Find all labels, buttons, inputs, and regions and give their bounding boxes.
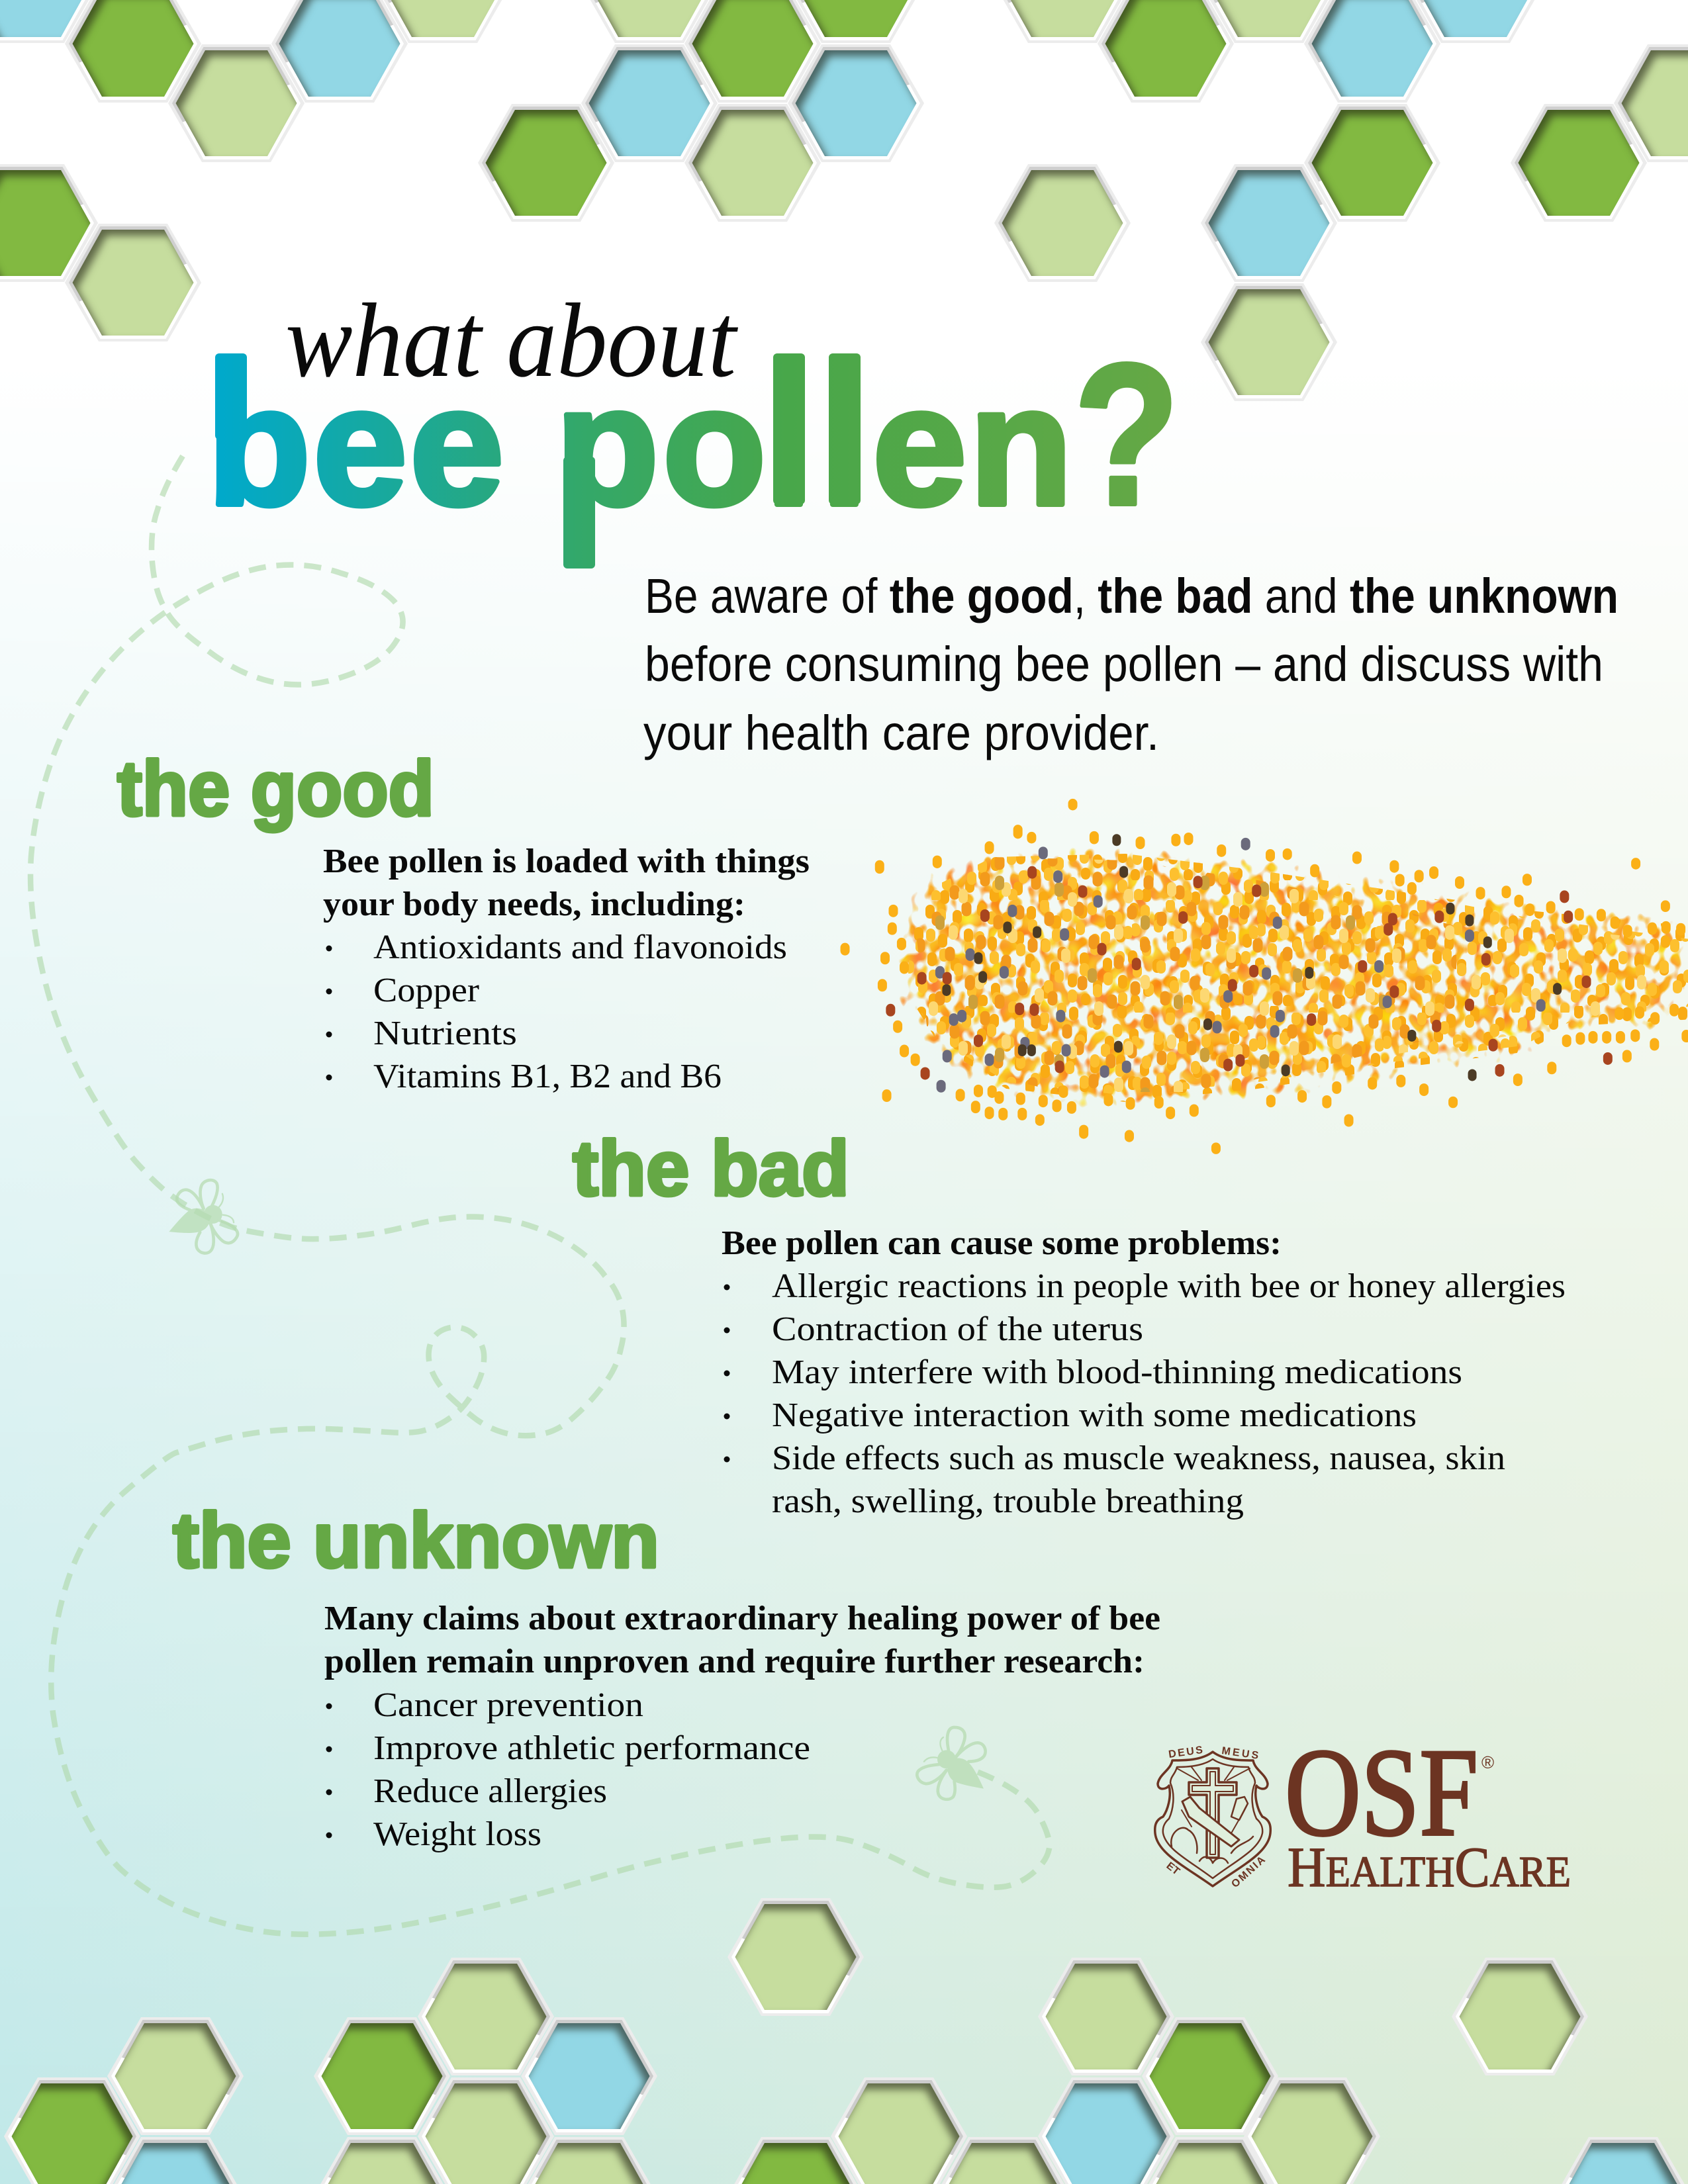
hexagon: light green [994, 164, 1131, 282]
title line: bee pollen?: ? [1074, 322, 1180, 547]
hexagon: light green [831, 2077, 967, 2184]
hexagon: light green [107, 2017, 244, 2135]
hexagon: green [684, 0, 821, 103]
hexagon: blue [1304, 0, 1440, 103]
hexagon: light green [65, 224, 201, 341]
hexagon: blue [1555, 2137, 1688, 2184]
heading: the unknown: the unknown [173, 1497, 659, 1584]
hexagon: light green [1201, 283, 1337, 401]
hexagon: green [65, 0, 201, 103]
dashed bee flight path [30, 456, 1049, 1934]
hexagon: green [4, 2077, 140, 2184]
crest motto: MEUS [1221, 1745, 1260, 1762]
heading: the good: the good [117, 745, 434, 833]
intro lines: the unknown [324, 1600, 1160, 1680]
honeycomb: top cluster [0, 0, 1688, 401]
hexagon: light green [684, 104, 821, 222]
hexagon: light green [1038, 1958, 1174, 2075]
intro lines: the unknown: Many claims about extraordinary healing power of bee [324, 1600, 1160, 1637]
hexagon: blue [788, 44, 924, 162]
heading: the bad: the bad [573, 1125, 849, 1212]
intro paragraph: Be aware of the good, the bad and the unknown [645, 569, 1618, 623]
hexagon: light green [935, 2137, 1071, 2184]
hexagon: green [727, 2137, 864, 2184]
bullet list: the bad: rash, swelling, trouble breathing [772, 1482, 1244, 1520]
bullet list: the unknown: Improve athletic performance [373, 1729, 810, 1767]
hexagon: green [1098, 0, 1234, 103]
hexagon: light green [1201, 0, 1337, 43]
hexagon: light green [521, 2137, 657, 2184]
hexagon: light green [375, 0, 511, 43]
intro paragraph: your health care provider. [643, 705, 1159, 760]
bullet list: the good: Nutrients [373, 1015, 517, 1052]
title line: bee pollen? [207, 322, 1180, 569]
bullet list: the unknown: Cancer prevention [373, 1686, 643, 1724]
hexagon: blue [271, 0, 408, 103]
hexagon: light green [1452, 1958, 1588, 2075]
intro paragraph [643, 569, 1618, 760]
hexagon: light green [418, 1958, 554, 2075]
hexagon: light green [1244, 2077, 1380, 2184]
hexagon: blue [107, 2137, 244, 2184]
bullet list: the good: Antioxidants and flavonoids [373, 929, 787, 966]
hexagon: light green [168, 44, 305, 162]
hexagon: blue [1201, 164, 1337, 282]
honeycomb: bottom cluster [4, 1898, 1688, 2184]
hexagon: green [314, 2017, 450, 2135]
icon: bee at end of flight path [917, 1727, 986, 1799]
hexagon: light green [1142, 2137, 1278, 2184]
hexagon: light green [727, 1898, 864, 2016]
title: what about bee pollen? [207, 281, 1180, 569]
hexagon: blue [0, 0, 98, 43]
hexagon: green [1304, 104, 1440, 222]
intro paragraph: before consuming bee pollen – and discuss with [645, 637, 1603, 692]
hexagon: green [1511, 104, 1647, 222]
wordmark: HealthCare: HEALTHCARE [1288, 1835, 1571, 1899]
hexagon: light green [581, 0, 718, 43]
hexagon: green [478, 104, 614, 222]
bullet list: the bad [724, 1267, 1566, 1520]
intro lines: the good: your body needs, including: [323, 886, 745, 923]
bullet list: the bad: Allergic reactions in people with bee or honey allergies [772, 1267, 1566, 1305]
section: the bad [573, 1125, 1566, 1520]
bullet list: the bad: Side effects such as muscle weakness, nausea, skin [772, 1439, 1505, 1477]
bullet list: the good: Vitamins B1, B2 and B6 [373, 1058, 722, 1095]
intro lines: the good [323, 842, 810, 923]
bullet list: the bad: Negative interaction with some medications [772, 1396, 1417, 1434]
section: the unknown [173, 1497, 1160, 1853]
hexagon: green [0, 164, 98, 282]
hexagon: blue [521, 2017, 657, 2135]
intro lines: the good: Bee pollen is loaded with things [323, 842, 810, 880]
hexagon: light green [314, 2137, 450, 2184]
hexagon: light green [418, 2077, 554, 2184]
bullet list: the unknown: Weight loss [373, 1815, 541, 1853]
bullet list: the bad: Contraction of the uterus [772, 1310, 1143, 1348]
hexagon: light green [1614, 44, 1688, 162]
logo: OSF HealthCare [1155, 1723, 1571, 1899]
bullet list: the unknown [326, 1686, 810, 1853]
crest motto [1164, 1745, 1268, 1890]
wordmark: OSF: OSF [1285, 1723, 1478, 1862]
hexagon: blue [581, 44, 718, 162]
image: scattered bee pollen granules [845, 803, 1688, 1150]
section: the good [117, 745, 810, 1095]
registered mark: ® [1481, 1752, 1494, 1772]
hexagon: light green [994, 0, 1131, 43]
crest motto: OMNIA [1229, 1854, 1268, 1890]
hexagon: green [788, 0, 924, 43]
bullet list: the unknown: Reduce allergies [373, 1772, 607, 1810]
title line: what about: what about [285, 281, 738, 399]
bullet list: the good [326, 929, 787, 1095]
crest motto: DEUS [1168, 1745, 1203, 1760]
title line: bee pollen?: bee pollen [207, 351, 1072, 541]
bullet list: the bad: May interfere with blood-thinning medications [772, 1353, 1462, 1391]
crest motto: ET [1164, 1860, 1182, 1878]
logo crest [1155, 1752, 1270, 1886]
intro line: the bad: Bee pollen can cause some problems: [722, 1224, 1282, 1262]
hexagon: blue [1038, 2077, 1174, 2184]
hexagon: blue [1407, 0, 1544, 43]
bullet list: the good: Copper [373, 972, 479, 1009]
icon: bee on left flight path [159, 1169, 256, 1264]
hexagon: green [1142, 2017, 1278, 2135]
intro lines: the unknown: pollen remain unproven and require further research: [324, 1643, 1145, 1680]
